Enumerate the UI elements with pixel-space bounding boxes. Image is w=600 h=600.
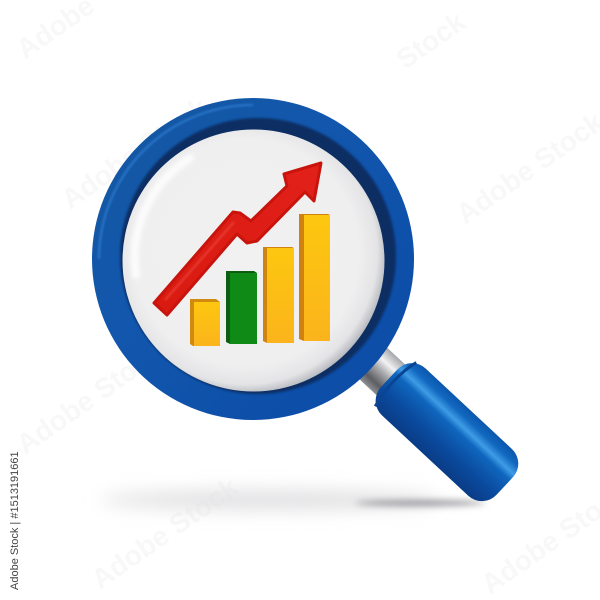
handle (338, 328, 527, 509)
glass lens (122, 130, 384, 392)
watermark pattern: Stock (391, 6, 471, 75)
stock credit: Adobe Stock | #1513191661 (9, 451, 21, 590)
bar 2 green (226, 271, 257, 344)
chrome neck (346, 336, 411, 400)
bar 4 yellow (299, 214, 330, 341)
watermark pattern: Adobe Stock (56, 91, 214, 215)
watermark pattern: Adobe Stock (11, 336, 169, 460)
bar chart (190, 214, 330, 346)
lens ring (92, 98, 414, 420)
ground shadow (100, 491, 485, 509)
blue grip (367, 355, 527, 509)
watermark pattern: Adobe Stock (86, 471, 244, 595)
rising red arrow (154, 163, 321, 315)
bar 3 yellow (263, 247, 294, 343)
bar 1 yellow (190, 299, 220, 346)
